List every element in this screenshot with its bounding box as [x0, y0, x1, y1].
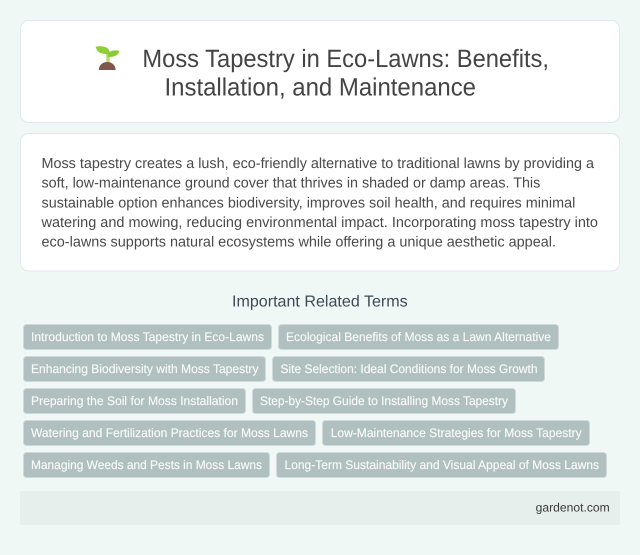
chip: step-by-step guide: Step-by-Step Guide to Installing Moss Tapestry — [260, 394, 509, 408]
title — [142, 45, 549, 102]
chip: ecological benefits: Ecological Benefits of Moss as a Lawn Alternative — [286, 330, 551, 344]
chip: step-by-step guide — [252, 388, 516, 414]
text block: description paragraph: sustainable option enhances biodiversity, improves soil health, and requires minimal — [42, 195, 575, 211]
text block: description paragraph: soft, low-maintenance ground cover that thrives in shaded or damp areas. This — [42, 176, 540, 192]
chip: weeds and pests — [24, 452, 270, 478]
chip: long-term sustainability — [276, 452, 606, 478]
text block: description paragraph: eco-lawns supports natural ecosystems while offering a unique aesthetic appeal. — [42, 234, 556, 250]
panel: related terms chips — [24, 324, 606, 478]
panel: title card — [20, 20, 620, 122]
chip: long-term sustainability: Long-Term Sustainability and Visual Appeal of Moss Lawns — [284, 458, 599, 472]
text block: description paragraph: Moss tapestry creates a lush, eco-friendly alternative to traditional lawns by providing a — [42, 156, 595, 172]
title: Moss Tapestry in Eco-Lawns: Benefits, — [142, 45, 549, 73]
chip: introduction: Introduction to Moss Tapestry in Eco-Lawns — [31, 330, 264, 344]
icon: seedling — [96, 46, 119, 70]
footer — [20, 491, 620, 525]
panel: description — [20, 134, 620, 271]
heading: related terms: Important Related Terms — [232, 294, 408, 310]
chip: ecological benefits — [278, 324, 558, 350]
chip: biodiversity: Enhancing Biodiversity with Moss Tapestry — [31, 362, 259, 376]
chip: weeds and pests: Managing Weeds and Pests in Moss Lawns — [31, 458, 262, 472]
chip: introduction — [24, 324, 272, 350]
chip: site selection: Site Selection: Ideal Conditions for Moss Growth — [280, 362, 538, 376]
chip: watering and fertilization: Watering and Fertilization Practices for Moss Lawns — [31, 426, 308, 440]
chip: preparing the soil: Preparing the Soil for Moss Installation — [31, 394, 238, 408]
footer: site name: gardenot.com — [536, 501, 610, 515]
text block: description paragraph — [41, 156, 598, 250]
chip: watering and fertilization — [24, 420, 316, 446]
chip: biodiversity — [24, 356, 266, 382]
chip: site selection — [272, 356, 544, 382]
chip: low-maintenance strategies — [322, 420, 590, 446]
text block: description paragraph: watering and mowing, reducing environmental impact. Incorporating moss tapestry into — [41, 215, 598, 231]
title: Installation, and Maintenance — [164, 74, 476, 102]
chip: preparing the soil — [24, 388, 246, 414]
chip: low-maintenance strategies: Low-Maintenance Strategies for Moss Tapestry — [331, 426, 582, 440]
